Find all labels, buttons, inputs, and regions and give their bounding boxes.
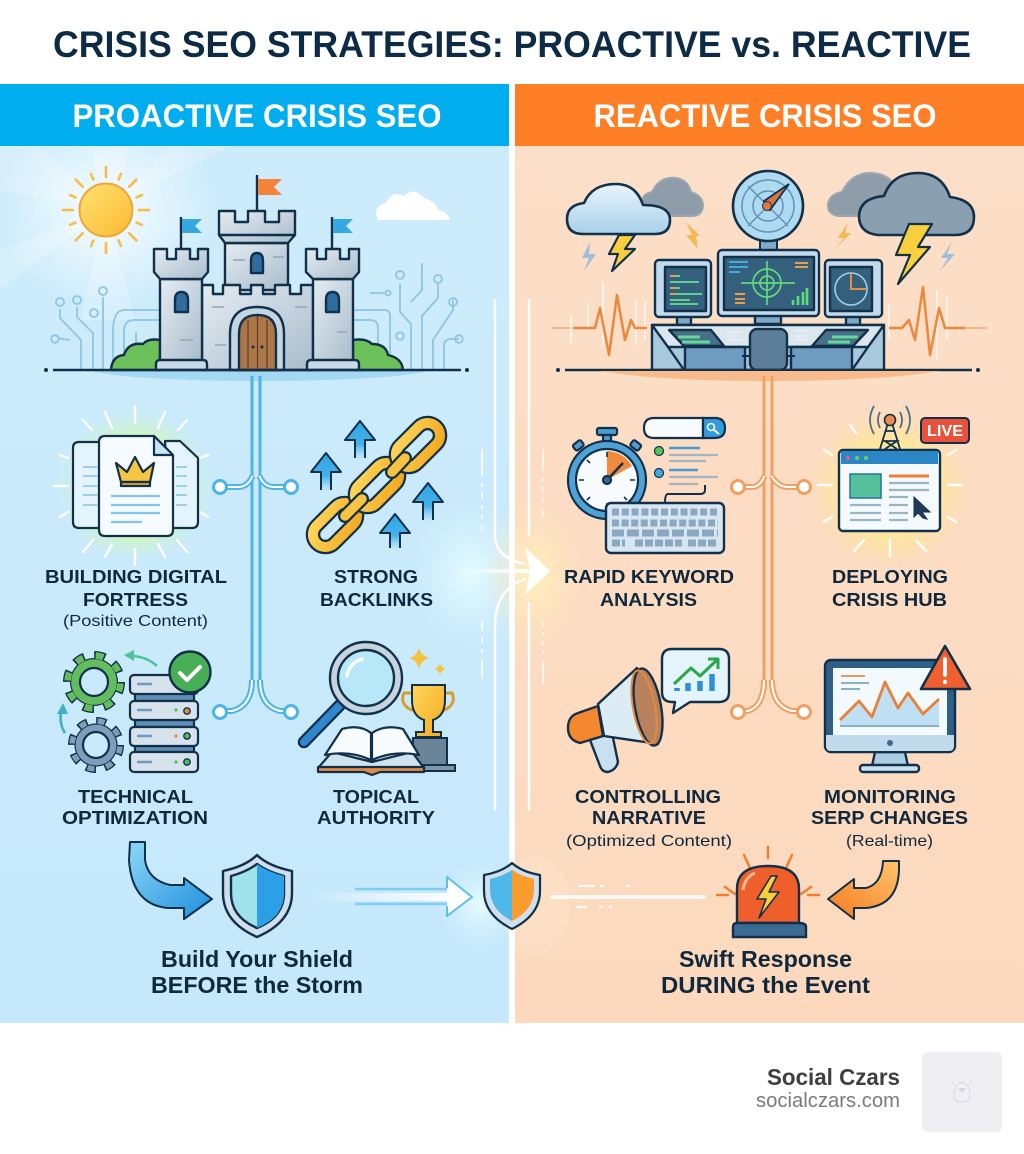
- monitor screen details: [670, 261, 867, 342]
- icon: cloud white: [376, 191, 450, 220]
- footer brand text: [756, 1064, 900, 1112]
- icon: storm cloud dark: [859, 173, 974, 235]
- arrow: build to shield: [310, 877, 472, 916]
- label: topical authority: AUTHORITY: [317, 807, 436, 828]
- icon: pulse lines: [552, 282, 987, 360]
- cycle arrows: [130, 656, 157, 666]
- footer logo tile: [922, 1052, 1002, 1132]
- circuit lines left: [51, 263, 463, 370]
- divider: white centre gutter: [509, 84, 515, 1024]
- icon: sun: [0, 146, 229, 320]
- footer brand text: Social Czars: [767, 1064, 900, 1090]
- center glow: [410, 495, 585, 955]
- ground shadow left: [90, 371, 430, 381]
- label: rapid keyword analysis: ANALYSIS: [600, 589, 697, 610]
- icon: controlling narrative megaphone: [568, 649, 729, 772]
- grey gear: [72, 721, 120, 769]
- icon: shield blue: [223, 855, 292, 937]
- label: controlling narrative: (Optimized Content): [566, 833, 732, 850]
- ground shadow right: [600, 371, 940, 381]
- ground line right: [556, 368, 980, 372]
- icon: castle: [111, 175, 403, 370]
- icon: rapid keyword analysis: [568, 418, 725, 553]
- label: technical optimization: [62, 786, 208, 828]
- header: proactive: PROACTIVE CRISIS SEO: [72, 98, 442, 134]
- label: monitoring serp changes: MONITORING: [824, 786, 956, 807]
- accent white lines: [482, 300, 543, 810]
- title: CRISIS SEO STRATEGIES: PROACTIVE vs. REACTIVE: [53, 24, 971, 65]
- icon: technical optimization: [57, 650, 210, 772]
- label: rapid keyword analysis: [564, 566, 734, 610]
- panel: proactive background: [0, 146, 509, 1023]
- label: swift response: DURING the Event: [661, 972, 870, 998]
- icon: curved blue arrow: [129, 842, 212, 919]
- connector: proactive spine: [214, 376, 298, 718]
- icon: monitoring serp monitor: [825, 646, 970, 772]
- label: building digital fortress: [45, 566, 227, 630]
- label: controlling narrative: [566, 786, 732, 850]
- label: building digital fortress: FORTRESS: [83, 589, 188, 610]
- label: deploying crisis hub: DEPLOYING: [832, 566, 948, 587]
- icon: control desk with monitors: [652, 250, 884, 370]
- header: proactive: [0, 84, 509, 146]
- label: swift response: [661, 946, 870, 998]
- label: topical authority: TOPICAL: [333, 786, 419, 807]
- header: reactive: REACTIVE CRISIS SEO: [594, 98, 936, 134]
- label: strong backlinks: STRONG: [334, 566, 418, 587]
- icon: topical authority: [304, 642, 455, 775]
- label: technical optimization: OPTIMIZATION: [62, 807, 208, 828]
- icon: alarm siren: [717, 847, 819, 937]
- label: deploying crisis hub: CRISIS HUB: [832, 589, 947, 610]
- label: swift response: Swift Response: [679, 946, 852, 972]
- label: building digital fortress: (Positive Content): [63, 613, 208, 630]
- icon: lightning bolts: [582, 222, 955, 284]
- label: monitoring serp changes: SERP CHANGES: [811, 807, 968, 828]
- label: build your shield: BEFORE the Storm: [151, 972, 363, 998]
- ground line left: [44, 368, 469, 372]
- icon: curved orange arrow: [828, 861, 899, 919]
- icon: strong backlinks chain: [308, 418, 445, 552]
- label: monitoring serp changes: [811, 786, 968, 850]
- icon: shield split: [484, 863, 540, 929]
- icon: radar dish: [733, 171, 803, 251]
- label: rapid keyword analysis: RAPID KEYWORD: [564, 566, 734, 587]
- icon: storm cloud light: [567, 184, 670, 234]
- label: technical optimization: TECHNICAL: [78, 786, 193, 807]
- label: controlling narrative: CONTROLLING: [575, 786, 721, 807]
- icon: deploying crisis hub: [810, 406, 970, 568]
- label: controlling narrative: NARRATIVE: [592, 807, 706, 828]
- label: building digital fortress: BUILDING DIGITAL: [45, 566, 227, 587]
- label: strong backlinks: [320, 566, 433, 610]
- green gear: [68, 656, 120, 708]
- label: monitoring serp changes: (Real-time): [846, 833, 933, 850]
- label: build your shield: [151, 946, 363, 998]
- check badge: [170, 652, 210, 692]
- icon: deploying crisis hub: LIVE: [927, 423, 963, 440]
- panel: reactive background: [515, 146, 1024, 1023]
- label: deploying crisis hub: [832, 566, 948, 610]
- server stack: [130, 675, 198, 772]
- label: strong backlinks: BACKLINKS: [320, 589, 433, 610]
- header: reactive: [515, 84, 1024, 146]
- arrow: proactive to reactive: [447, 547, 550, 595]
- icon: digital fortress documents: [54, 406, 213, 565]
- connector: reactive spine: [732, 376, 810, 718]
- label: build your shield: Build Your Shield: [161, 946, 353, 972]
- dashes toward siren: [552, 886, 704, 907]
- label: topical authority: [317, 786, 436, 828]
- icon: back clouds reactive: [641, 173, 905, 216]
- footer brand text: socialczars.com: [756, 1090, 900, 1112]
